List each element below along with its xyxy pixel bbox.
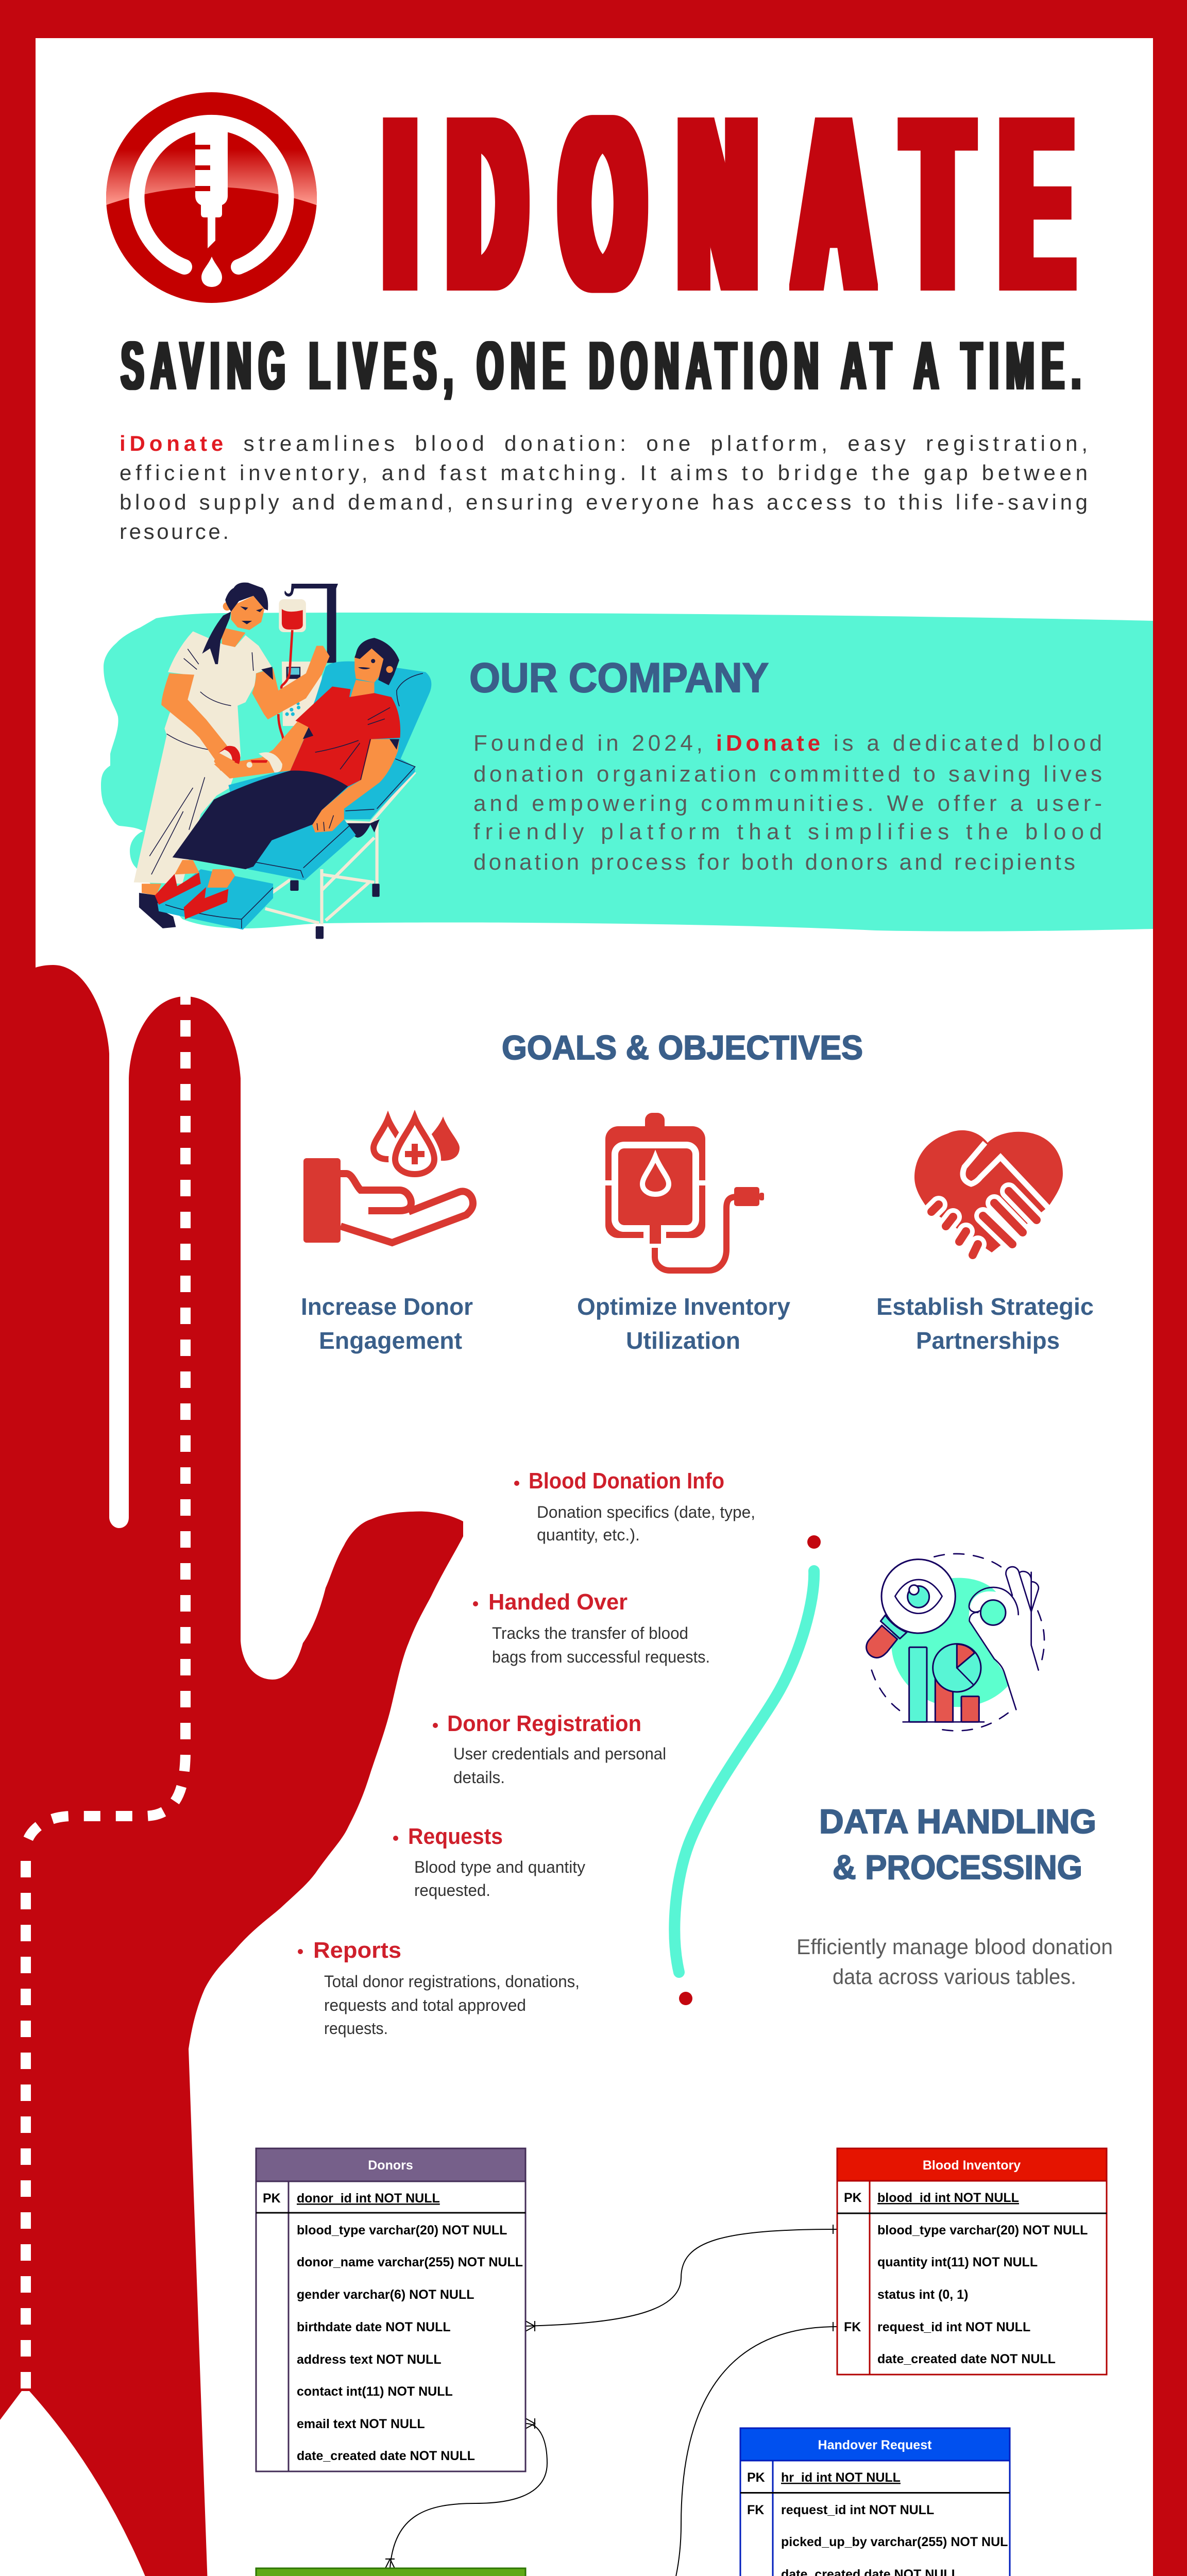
item: reports: Total donor registrations, donations, — [324, 1972, 580, 1991]
goal labels: Establish Strategic — [876, 1293, 1094, 1320]
company paragraph: friendly platform that simplifies the blood — [473, 819, 1102, 844]
item: handed over: bags from successful requests. — [492, 1648, 710, 1666]
item: requests: Blood type and quantity — [414, 1858, 585, 1876]
goal labels: Optimize Inventory — [577, 1293, 790, 1320]
table: blood inventory: date_created date NOT NULL — [877, 2352, 1056, 2366]
data handling heading — [819, 1802, 1096, 1886]
item: blood donation info: quantity, etc.). — [537, 1526, 640, 1544]
intro paragraph — [120, 431, 1090, 544]
item: donor registration: User credentials and personal — [453, 1744, 666, 1763]
table: donors: date_created date NOT NULL — [297, 2449, 475, 2463]
illustration: blood donor and nurse — [134, 583, 431, 939]
table: handover request: request_id int NOT NULL — [781, 2503, 934, 2517]
item: blood donation info: Donation specifics (date, type, — [537, 1503, 755, 1521]
company paragraph: Founded in 2024, iDonate is a dedicated blood — [473, 731, 1102, 756]
intro paragraph: iDonate streamlines blood donation: one platform, easy registration, — [120, 431, 1090, 455]
item: handed over — [473, 1589, 710, 1666]
goals heading: GOALS & OBJECTIVES — [502, 1028, 863, 1066]
nurse body — [134, 583, 330, 928]
table: handover request: PK — [747, 2470, 765, 2485]
data handling description — [796, 1935, 1113, 1989]
data handling heading: DATA HANDLING — [819, 1802, 1096, 1840]
table: donors: blood_type varchar(20) NOT NULL — [297, 2223, 507, 2238]
blood bag — [278, 599, 306, 755]
intro paragraph: resource. — [120, 519, 231, 544]
table: blood inventory: blood_type varchar(20) NOT NULL — [877, 2223, 1088, 2238]
item: handed over: Handed Over — [488, 1589, 628, 1615]
subtitle: SAVING LIVES, ONE DONATION AT A TIME. — [121, 328, 1081, 404]
title: IDONATE — [386, 67, 1071, 339]
blood drop in hand — [0, 2391, 174, 2576]
item: donor registration — [433, 1711, 666, 1787]
data handling heading: & PROCESSING — [833, 1848, 1082, 1886]
item: blood donation info — [514, 1468, 755, 1544]
company paragraph: donation organization committed to saving lives — [473, 761, 1102, 787]
table: donors: donor_id int NOT NULL — [297, 2191, 440, 2206]
data handling description: Efficiently manage blood donation — [796, 1935, 1113, 1959]
table: blood inventory: FK — [844, 2320, 861, 2334]
item: blood donation info: Blood Donation Info — [529, 1468, 724, 1494]
goal labels: Partnerships — [916, 1327, 1060, 1354]
item: reports: requests. — [324, 2019, 388, 2038]
table: handover request: hr_id int NOT NULL — [781, 2470, 901, 2485]
data handling description: data across various tables. — [833, 1964, 1076, 1989]
item: reports: Reports — [313, 1938, 401, 1963]
goal labels — [301, 1293, 1094, 1354]
table: blood inventory: status int (0, 1) — [877, 2287, 968, 2302]
table: blood inventory: quantity int(11) NOT NULL — [877, 2255, 1038, 2269]
teal timeline curve — [674, 1535, 821, 2005]
table: donors: donor_name varchar(255) NOT NULL — [297, 2255, 523, 2269]
company paragraph — [473, 731, 1102, 875]
donation machine — [282, 662, 321, 726]
intro paragraph: efficient inventory, and fast matching. It aims to bridge the gap between — [120, 461, 1090, 485]
goal labels: Utilization — [626, 1327, 740, 1354]
table: donors: contact int(11) NOT NULL — [297, 2384, 453, 2399]
item: requests: requested. — [414, 1881, 490, 1900]
table: donors: PK — [263, 2191, 281, 2206]
table: donors — [256, 2148, 525, 2471]
connectors — [385, 2225, 874, 2576]
table: donors: birthdate date NOT NULL — [297, 2320, 451, 2334]
table: donors: email text NOT NULL — [297, 2417, 425, 2431]
data list — [298, 1468, 755, 2038]
intro paragraph: blood supply and demand, ensuring everyone has access to this life-saving — [120, 490, 1090, 514]
table: handover request: FK — [747, 2503, 764, 2517]
our company heading: OUR COMPANY — [469, 655, 769, 701]
table: blood inventory: request_id int NOT NULL — [877, 2320, 1030, 2334]
table: handover request — [740, 2428, 1016, 2576]
nurse arm — [161, 673, 235, 771]
table: blood inventory — [837, 2148, 1107, 2375]
item: handed over: Tracks the transfer of blood — [492, 1624, 688, 1642]
goal labels: Increase Donor — [301, 1293, 473, 1320]
item: donor registration: Donor Registration — [447, 1711, 641, 1736]
item: requests: Requests — [408, 1824, 503, 1849]
table: request — [256, 2568, 525, 2576]
white dashed vein — [26, 996, 185, 2391]
icon: handshake heart — [914, 1130, 1063, 1255]
table: blood inventory: PK — [844, 2191, 862, 2205]
patient — [155, 638, 400, 919]
goal labels: Engagement — [319, 1327, 462, 1354]
table: handover request: picked_up_by varchar(255) NOT NULL — [781, 2535, 1016, 2549]
company paragraph: donation process for both donors and recipients — [473, 850, 1075, 875]
table: donors: gender varchar(6) NOT NULL — [297, 2287, 474, 2302]
item: reports — [298, 1938, 580, 2038]
table: blood inventory: Blood Inventory — [923, 2158, 1021, 2173]
item: requests — [393, 1824, 585, 1900]
item: donor registration: details. — [453, 1768, 505, 1787]
icon: data analysis — [867, 1554, 1044, 1731]
logo — [103, 92, 319, 303]
table: donors: address text NOT NULL — [297, 2352, 442, 2367]
table: blood inventory: blood_id int NOT NULL — [877, 2191, 1019, 2205]
company paragraph: and empowering communities. We offer a user- — [473, 791, 1102, 816]
table: handover request: Handover Request — [818, 2438, 932, 2452]
item: reports: requests and total approved — [324, 1996, 526, 2014]
donation chair — [158, 662, 431, 939]
iv pole — [284, 584, 338, 663]
teal band — [101, 613, 1153, 931]
icon: blood bag — [603, 1113, 764, 1270]
icon: hand with blood drops — [303, 1116, 473, 1243]
table: donors: Donors — [368, 2158, 413, 2173]
